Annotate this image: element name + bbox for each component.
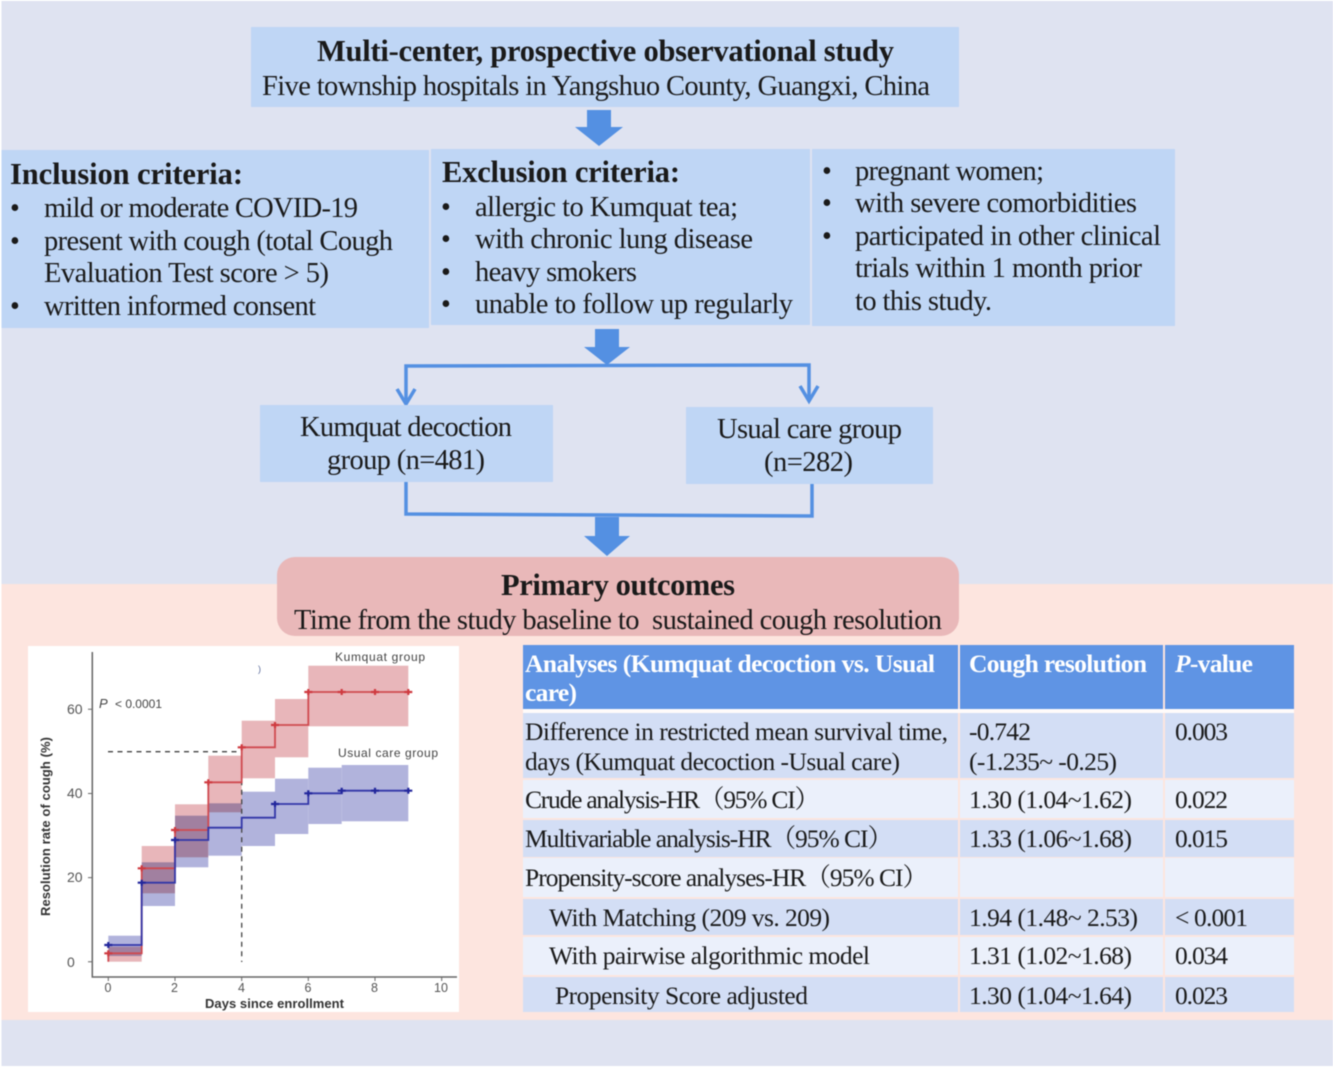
x axis tick labels: 2 bbox=[171, 981, 178, 995]
arrow: title to criteria bbox=[575, 110, 623, 146]
p-value annotation: P bbox=[99, 696, 108, 711]
exclusion criteria list: • bbox=[441, 224, 451, 255]
heading: primary outcomes: Primary outcomes bbox=[501, 568, 735, 602]
legend label: usual care group: Usual care group bbox=[338, 746, 438, 760]
box: Kumquat decoction group: Kumquat decoction bbox=[300, 412, 512, 443]
exclusion criteria list: • bbox=[441, 257, 451, 288]
heading: study design: Multi-center, prospective observational study bbox=[317, 34, 894, 68]
x axis tick labels: 0 bbox=[104, 981, 112, 995]
confidence band: usual care group bbox=[108, 765, 408, 956]
panel: further exclusion criteria: trials within 1 month prior bbox=[855, 253, 1142, 284]
table row: multivariable analysis: 1.33 (1.06~1.68) bbox=[969, 824, 1132, 853]
table: cough resolution analyses bbox=[523, 645, 1294, 1012]
y axis tick labels: 40 bbox=[67, 785, 83, 801]
panel: further exclusion criteria: with severe comorbidities bbox=[855, 188, 1137, 219]
table row: with matching: 1.94 (1.48~ 2.53) bbox=[969, 903, 1138, 932]
panel: further exclusion criteria bbox=[812, 149, 1175, 326]
inclusion criteria list: mild or moderate COVID-19 bbox=[44, 193, 358, 224]
y axis tick labels: 60 bbox=[67, 701, 83, 717]
panel: inclusion criteria bbox=[2, 150, 429, 328]
y axis title: Resolution rate of cough (%) bbox=[38, 737, 53, 916]
table row: propensity score adjusted: 1.30 (1.04~1.64) bbox=[969, 981, 1132, 1010]
exclusion criteria list: heavy smokers bbox=[475, 257, 637, 288]
table row: restricted mean survival time: Difference in restricted mean survival time, bbox=[525, 717, 948, 746]
box: Kumquat decoction group bbox=[260, 405, 553, 482]
panel: further exclusion criteria: • bbox=[822, 156, 832, 187]
table row: with matching: With Matching (209 vs. 209) bbox=[549, 903, 830, 932]
chart: cough resolution rate over time: ) bbox=[258, 664, 261, 674]
step line: Kumquat group bbox=[104, 689, 412, 962]
inclusion criteria list: present with cough (total Cough bbox=[44, 226, 393, 257]
table row: multivariable analysis: 0.015 bbox=[1175, 824, 1228, 853]
y axis tick labels bbox=[67, 701, 83, 970]
subtitle: study sites: Five township hospitals in Yangshuo County, Guangxi, China bbox=[262, 71, 930, 102]
title box bbox=[251, 27, 959, 107]
table row: pairwise algorithmic model: With pairwise algorithmic model bbox=[549, 941, 870, 970]
legend label: Kumquat group: Kumquat group bbox=[335, 650, 425, 664]
table row: crude analysis: 1.30 (1.04~1.62) bbox=[969, 785, 1132, 814]
panel: primary outcomes bbox=[277, 557, 959, 636]
axes bbox=[88, 652, 457, 981]
panel: further exclusion criteria: • bbox=[822, 188, 832, 219]
table row: restricted mean survival time bbox=[523, 713, 1294, 778]
table row: propensity-score analyses: Propensity-score analyses-HR（95% CI） bbox=[525, 863, 928, 892]
table row: crude analysis bbox=[523, 780, 1294, 818]
table row: crude analysis: 0.022 bbox=[1175, 785, 1228, 814]
table row: propensity score adjusted: 0.023 bbox=[1175, 981, 1228, 1010]
table row: pairwise algorithmic model: 1.31 (1.02~1.68) bbox=[969, 941, 1132, 970]
table row: crude analysis: Crude analysis-HR（95% CI） bbox=[525, 785, 820, 814]
reference lines: median at day 4 bbox=[108, 752, 242, 962]
table row: with matching: < 0.001 bbox=[1175, 903, 1248, 932]
exclusion criteria list: • bbox=[441, 192, 451, 223]
table row: propensity score adjusted bbox=[523, 977, 1294, 1012]
table header: care) bbox=[525, 678, 577, 707]
panel: further exclusion criteria: • bbox=[822, 221, 832, 252]
chart: cough resolution rate over time bbox=[28, 646, 459, 1012]
exclusion criteria list: • bbox=[441, 289, 451, 320]
x axis tick labels bbox=[104, 981, 448, 995]
box: usual care group: Usual care group bbox=[717, 414, 902, 445]
table row: pairwise algorithmic model: 0.034 bbox=[1175, 941, 1228, 970]
x axis tick labels: 10 bbox=[434, 981, 448, 995]
panel: further exclusion criteria: pregnant women; bbox=[855, 156, 1044, 187]
confidence band: Kumquat group bbox=[108, 666, 408, 962]
x axis title: Days since enrollment bbox=[205, 996, 345, 1011]
inclusion criteria list: • bbox=[10, 291, 20, 322]
box: usual care group: (n=282) bbox=[764, 447, 853, 478]
x axis tick labels: 6 bbox=[304, 981, 312, 995]
inclusion criteria list: • bbox=[10, 193, 20, 224]
table row: with matching bbox=[523, 899, 1294, 935]
table row: multivariable analysis bbox=[523, 820, 1294, 857]
table header: Analyses (Kumquat decoction vs. Usual bbox=[525, 649, 935, 678]
inclusion criteria list bbox=[10, 193, 393, 322]
box: usual care group bbox=[686, 407, 933, 484]
panel: further exclusion criteria: to this study. bbox=[855, 286, 992, 317]
y axis tick labels: 0 bbox=[67, 954, 75, 970]
exclusion criteria list: allergic to Kumquat tea; bbox=[475, 192, 738, 223]
table row: restricted mean survival time: 0.003 bbox=[1175, 717, 1228, 746]
table row: multivariable analysis: Multivariable analysis-HR（95% CI） bbox=[525, 824, 893, 853]
table row: propensity score adjusted: Propensity Score adjusted bbox=[555, 981, 808, 1010]
panel: exclusion criteria bbox=[431, 149, 810, 325]
inclusion criteria list: written informed consent bbox=[44, 291, 316, 322]
table row: pairwise algorithmic model bbox=[523, 937, 1294, 975]
table row: propensity-score analyses bbox=[523, 858, 1294, 897]
p-value annotation: < 0.0001 bbox=[115, 697, 162, 711]
table row: restricted mean survival time: days (Kumquat decoction -Usual care) bbox=[525, 747, 900, 776]
table row: restricted mean survival time: (-1.235~ -0.25) bbox=[969, 747, 1117, 776]
arrow: groups to primary outcomes bbox=[406, 482, 812, 556]
heading: exclusion criteria: Exclusion criteria: bbox=[442, 155, 680, 189]
x axis tick labels: 4 bbox=[238, 981, 245, 995]
inclusion criteria list: • bbox=[10, 226, 20, 257]
table row: restricted mean survival time: -0.742 bbox=[969, 717, 1031, 746]
panel: further exclusion criteria: participated in other clinical bbox=[855, 221, 1161, 252]
x axis tick labels: 8 bbox=[371, 981, 378, 995]
panel: primary outcomes: Time from the study baseline to sustained cough resolution bbox=[294, 605, 942, 636]
heading: inclusion criteria: Inclusion criteria: bbox=[10, 157, 243, 191]
step line: usual care group bbox=[104, 788, 412, 948]
p-value annotation bbox=[99, 696, 162, 711]
inclusion criteria list: Evaluation Test score > 5) bbox=[44, 258, 329, 289]
exclusion criteria list: with chronic lung disease bbox=[475, 224, 753, 255]
arrow: criteria to groups bbox=[397, 329, 818, 404]
y axis tick labels: 20 bbox=[67, 869, 83, 885]
table header bbox=[523, 645, 1294, 709]
box: Kumquat decoction group: group (n=481) bbox=[327, 445, 485, 476]
table header: Cough resolution bbox=[969, 649, 1147, 678]
exclusion criteria list: unable to follow up regularly bbox=[475, 289, 794, 320]
table header: P-value bbox=[1174, 649, 1253, 678]
exclusion criteria list bbox=[441, 192, 794, 320]
